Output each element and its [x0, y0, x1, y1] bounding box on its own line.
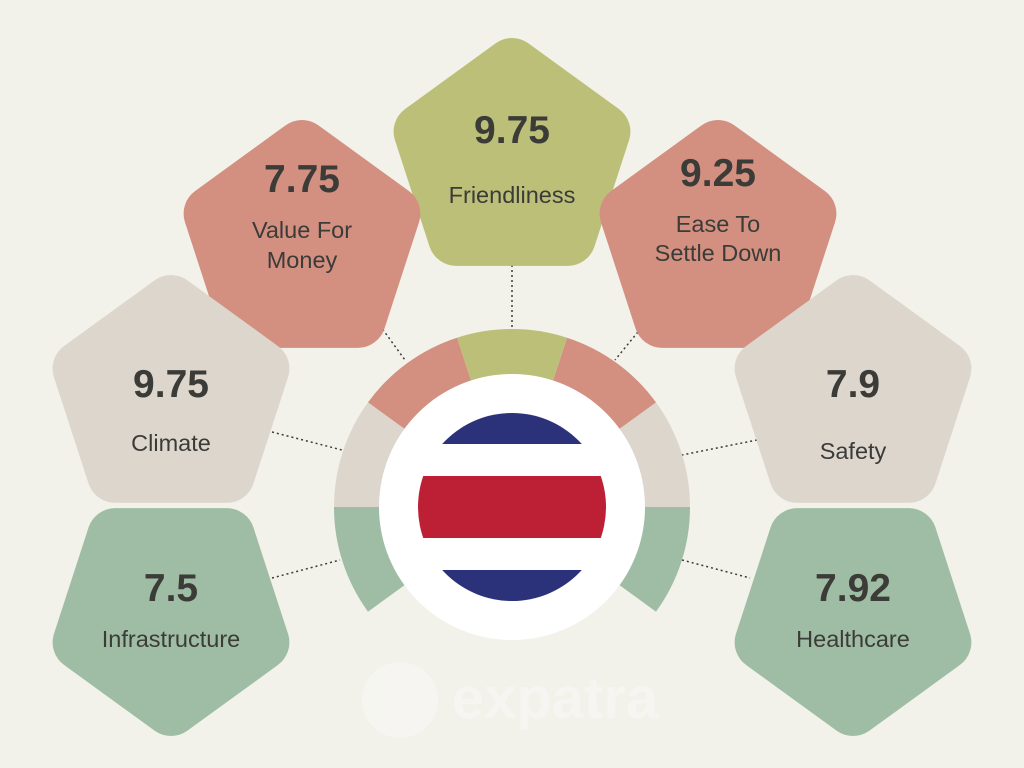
ring chart [334, 329, 690, 612]
logo: expatra watermark: expatra [452, 666, 659, 731]
connector lines [272, 265, 757, 578]
panel: Value For Money: Value For [252, 217, 352, 243]
panel: Climate: 9.75 [133, 363, 209, 406]
logo: expatra watermark [362, 662, 659, 738]
panel: Safety [763, 303, 943, 475]
panel: Healthcare: Healthcare [796, 626, 910, 652]
panel: Ease To Settle Down: Settle Down [655, 240, 781, 266]
panel: Healthcare [763, 536, 943, 708]
panel: Value For Money [212, 148, 392, 320]
panel: Climate: Climate [131, 430, 211, 456]
panel: Value For Money: Money [267, 247, 338, 273]
panel: Friendliness: 9.75 [474, 109, 550, 152]
panel: Ease To Settle Down: Ease To [676, 211, 760, 237]
panel: Safety: 7.9 [826, 363, 880, 406]
flag: Costa Rica [379, 374, 645, 640]
panel: Infrastructure [81, 536, 261, 708]
panel: Infrastructure: 7.5 [144, 567, 198, 610]
panel: Safety: Safety [820, 438, 887, 464]
panel: Friendliness: Friendliness [449, 182, 575, 208]
panel: Infrastructure: Infrastructure [102, 626, 240, 652]
panel: Value For Money: 7.75 [264, 158, 340, 201]
panel: Healthcare: 7.92 [815, 567, 891, 610]
panel: Ease To Settle Down [628, 148, 808, 320]
panel: Climate [81, 303, 261, 475]
panel: Ease To Settle Down: 9.25 [680, 152, 756, 195]
panel: Friendliness [422, 66, 602, 238]
